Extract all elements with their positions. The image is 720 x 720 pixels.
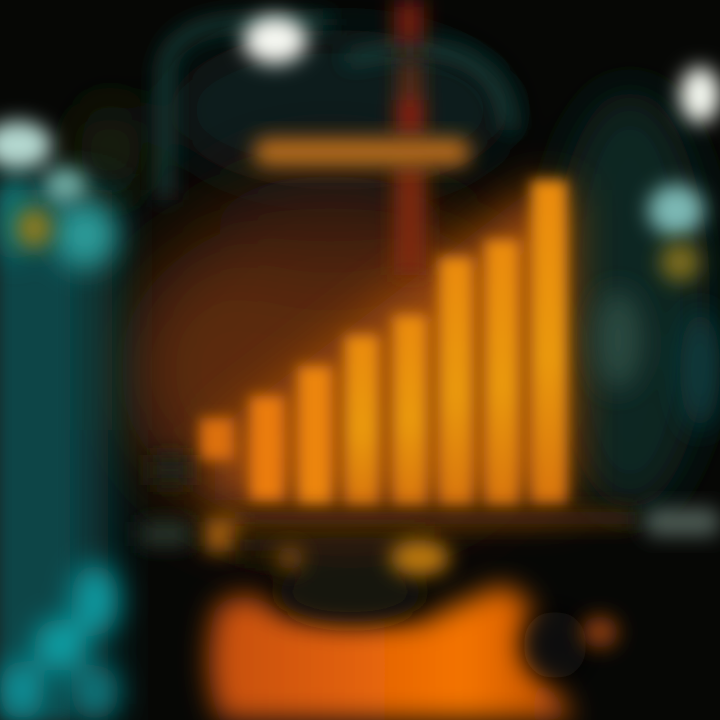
small glow under the chart bbox=[276, 540, 618, 648]
bar 5 bbox=[393, 315, 427, 507]
central brown haze bbox=[120, 175, 540, 530]
orange glow between the bars bbox=[215, 190, 570, 505]
dark left blocks bbox=[140, 455, 190, 546]
bottom orange pool bbox=[209, 585, 575, 720]
bar 3 bbox=[298, 366, 332, 506]
left teal column bbox=[0, 190, 112, 720]
grey block at right bbox=[645, 508, 720, 536]
teal arch outline bbox=[165, 22, 510, 200]
scale: orange beam bbox=[254, 138, 470, 166]
bar 4 bbox=[345, 335, 379, 507]
left edge teal fill bbox=[0, 190, 70, 720]
right side grey-green column bbox=[594, 290, 720, 430]
white highlights bbox=[0, 16, 720, 236]
bar 2 bbox=[250, 396, 284, 502]
bright teal patches bbox=[0, 170, 119, 720]
chart base bbox=[205, 510, 635, 552]
bar 8 bbox=[531, 180, 567, 505]
dark bowl and shadows bbox=[240, 535, 587, 679]
bar 6 bbox=[439, 257, 473, 507]
bar chart bbox=[200, 180, 567, 507]
scale: red vertical post bbox=[394, 0, 426, 275]
yellow accents bbox=[16, 208, 700, 282]
background haze: top structures bbox=[80, 30, 710, 510]
bar 1 bbox=[200, 418, 234, 460]
bar 7 bbox=[485, 240, 519, 507]
